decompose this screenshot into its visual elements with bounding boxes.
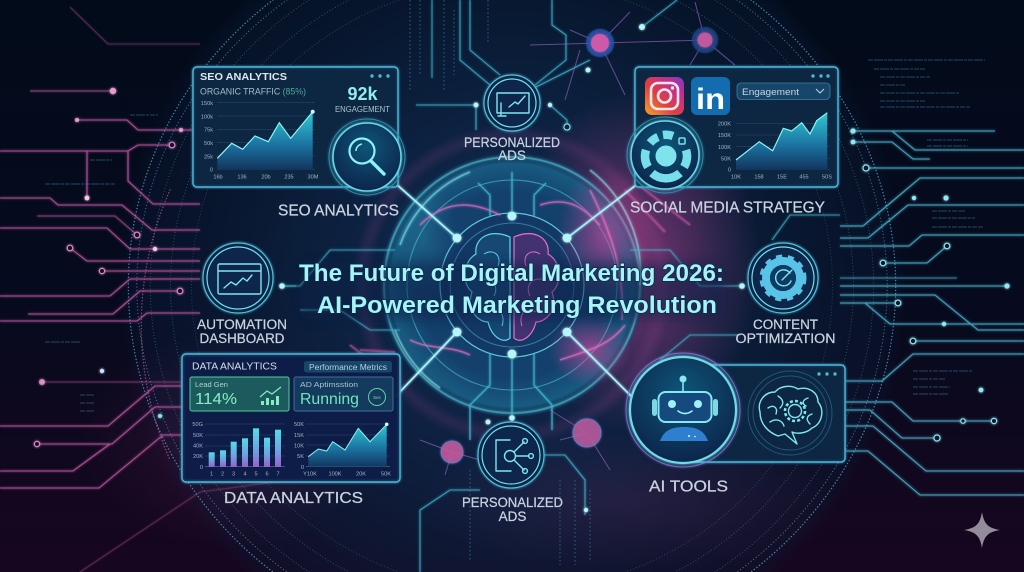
bar chart: 5	[254, 472, 258, 478]
icon: content optimization gear	[748, 243, 818, 313]
bar chart	[192, 422, 285, 478]
bar chart: 20K	[193, 454, 203, 460]
card: ad optimisation: AD Aptimsstion	[300, 380, 358, 389]
area chart: performance: 0	[301, 465, 304, 471]
label: personalized ads top: PERSONALIZED	[464, 135, 560, 150]
area chart: performance: 5K	[297, 454, 304, 460]
area chart: performance: 20K	[356, 472, 366, 478]
window dots	[370, 74, 390, 78]
icon: sparkle watermark	[964, 512, 1000, 548]
area chart: organic traffic: 75k	[204, 128, 213, 134]
panel: AI tools	[690, 365, 845, 462]
title: AI-Powered Marketing Revolution	[317, 292, 717, 319]
left circuit nodes	[34, 88, 183, 447]
area chart: engagement: 15E	[777, 174, 787, 180]
bar chart: 4	[243, 472, 247, 478]
area chart: engagement: 455	[799, 174, 809, 180]
card: lead gen: Lead Gen	[195, 380, 228, 389]
tag: performance metrics	[304, 361, 392, 372]
area chart: organic traffic: 100k	[201, 114, 213, 120]
stat: 92k engagement: 92k	[347, 84, 378, 104]
card: ad optimisation	[294, 377, 393, 411]
area chart: engagement	[718, 113, 832, 180]
right circuit nodes	[850, 128, 1010, 441]
bar chart: 2	[221, 472, 224, 478]
bar chart: 50G	[192, 422, 203, 428]
area chart: organic traffic: 0	[210, 168, 213, 174]
label: SEO analytics: SEO ANALYTICS	[278, 202, 399, 220]
card: ad optimisation: Sec	[373, 395, 382, 400]
bar chart: 50K	[193, 433, 203, 439]
label: social media strategy: SOCIAL MEDIA STRATEGY	[630, 200, 825, 216]
title: The Future of Digital Marketing 2026:	[299, 260, 724, 287]
area chart: organic traffic: 16b	[213, 174, 223, 180]
area chart: organic traffic: 136	[237, 174, 247, 180]
area chart: engagement: 50S	[822, 174, 832, 180]
area chart: organic traffic: 25k	[204, 154, 213, 160]
icon: personalized ads top	[484, 75, 540, 131]
icon: LinkedIn: in	[696, 83, 725, 116]
icon: LinkedIn	[691, 77, 730, 116]
icon: personalized ads bottom	[478, 422, 544, 488]
right circuit lines (cyan)	[840, 131, 1024, 495]
area chart: performance: 100K	[328, 472, 342, 478]
bar chart: 3	[232, 472, 235, 478]
data rain columns	[410, 0, 590, 565]
bar chart: 6	[265, 472, 269, 478]
area chart: performance: 15K	[294, 433, 304, 439]
card: lead gen	[190, 377, 289, 411]
dropdown: engagement: Engagement	[742, 87, 799, 98]
panel heading: SEO analytics: SEO ANALYTICS	[200, 71, 287, 83]
window dots	[817, 372, 837, 376]
panel heading: data analytics: DATA ANALYTICS	[192, 360, 277, 372]
area chart: engagement: 10K	[731, 174, 741, 180]
label: content optimization: CONTENT	[753, 317, 818, 332]
area chart: engagement: 150K	[718, 133, 731, 139]
area chart: performance: Y10K	[303, 472, 317, 478]
area chart: organic traffic	[201, 101, 319, 180]
central orb	[362, 135, 662, 435]
stat: 92k engagement	[335, 84, 390, 114]
hub connector lines and nodes	[279, 0, 840, 572]
dotted globe	[128, 0, 896, 572]
area chart: organic traffic: 150k	[201, 101, 213, 107]
chart subtitle: ORGANIC TRAFFIC (85%)	[200, 86, 306, 96]
icon: social hub	[627, 117, 703, 193]
bar chart: 40K	[193, 444, 203, 450]
area chart: organic traffic: 50k	[204, 141, 213, 147]
icon: magnifier	[329, 119, 405, 195]
area chart: engagement: 200K	[718, 122, 731, 128]
area chart: performance: 10K	[294, 444, 304, 450]
label: AI tools: AI TOOLS	[649, 478, 728, 496]
window dots	[811, 74, 830, 78]
label: automation dashboard: AUTOMATION	[197, 317, 287, 332]
label: personalized ads top: ADS	[498, 148, 526, 163]
area chart: engagement: 100K	[718, 145, 731, 151]
area chart: performance: 50K	[294, 422, 304, 428]
bar chart: 1	[210, 472, 213, 478]
neurons	[420, 2, 735, 475]
area chart: organic traffic: 235	[284, 174, 294, 180]
icon: robot	[626, 353, 740, 467]
label: data analytics: DATA ANALYTICS	[224, 490, 363, 507]
dropdown: engagement	[737, 83, 830, 100]
panel: social media	[635, 67, 838, 187]
panel: SEO analytics	[193, 67, 398, 187]
area chart: engagement: 50K	[721, 156, 731, 162]
tag: performance metrics: Performance Metrics	[309, 363, 387, 372]
panel: data analytics	[182, 354, 400, 482]
area chart: performance: 50K	[381, 472, 391, 478]
area chart: organic traffic: 20b	[261, 174, 271, 180]
stat: 92k engagement: ENGAGEMENT	[335, 105, 390, 114]
icon: brain with gear	[748, 371, 832, 455]
title	[299, 260, 725, 320]
area chart: engagement: 158	[754, 174, 764, 180]
icon: Instagram	[645, 77, 684, 115]
area chart: organic traffic: 30M	[308, 174, 319, 180]
area chart: performance	[294, 422, 391, 478]
label: personalized ads bottom: PERSONALIZED	[462, 495, 563, 510]
label: content optimization: OPTIMIZATION	[736, 331, 836, 346]
area chart: engagement: 0	[728, 168, 731, 174]
central brain	[465, 234, 559, 340]
icon: automation dashboard	[203, 243, 273, 313]
card: lead gen: 114%	[195, 391, 237, 408]
label: personalized ads bottom: ADS	[499, 509, 526, 524]
left circuit lines (pink)	[0, 7, 290, 572]
decorative code snippets	[45, 60, 985, 411]
card: ad optimisation: Running	[300, 391, 359, 408]
bar chart: 7	[276, 472, 280, 478]
label: automation dashboard: DASHBOARD	[200, 331, 285, 346]
bar chart: 0	[200, 465, 203, 471]
